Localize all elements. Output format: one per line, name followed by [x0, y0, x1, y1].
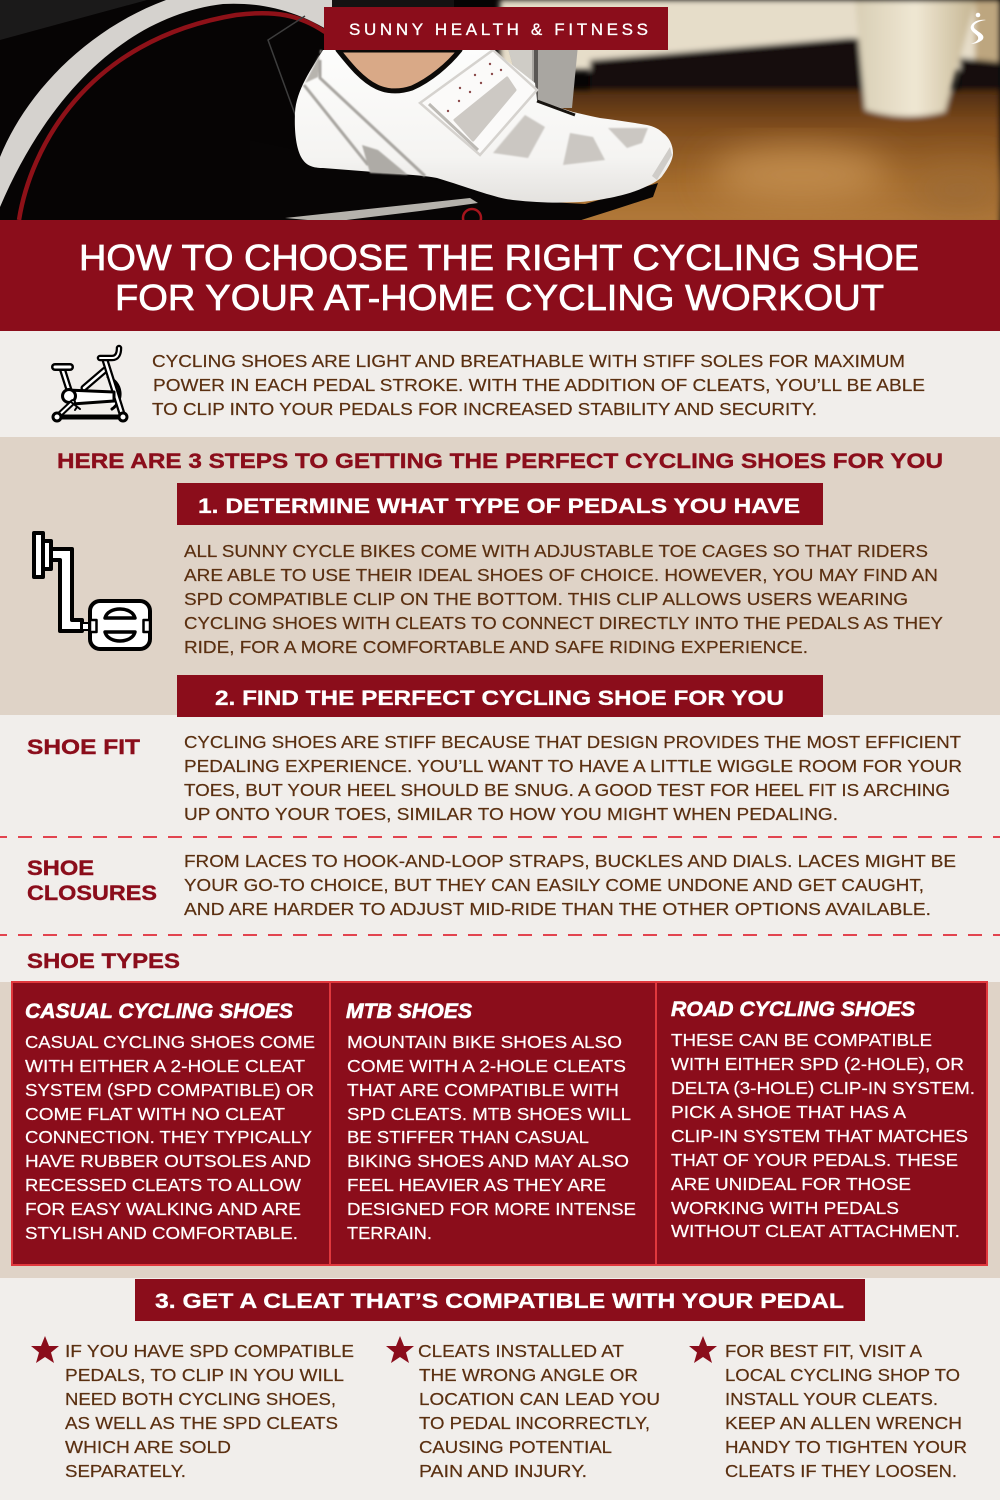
step 1 banner [177, 483, 823, 525]
tip 1 text: SEPARATELY. [65, 1461, 186, 1481]
card: mtb shoes: BE STIFFER THAN CASUAL [347, 1127, 589, 1147]
step 1 text: RIDE, FOR A MORE COMFORTABLE AND SAFE RIDING EXPERIENCE. [184, 637, 808, 657]
card: road cycling shoes [671, 998, 975, 1241]
step 1 banner: 1. DETERMINE WHAT TYPE OF PEDALS YOU HAVE [198, 494, 800, 518]
card: casual cycling shoes [25, 1000, 315, 1243]
steps heading: HERE ARE 3 STEPS TO GETTING THE PERFECT CYCLING SHOES FOR YOU [57, 449, 943, 473]
header tag: brand name [324, 7, 668, 50]
step 3 banner [135, 1279, 865, 1321]
card: casual cycling shoes: CASUAL CYCLING SHOES [25, 1000, 293, 1023]
step 2 banner: 2. FIND THE PERFECT CYCLING SHOE FOR YOU [215, 686, 784, 710]
icon: exercise bike [53, 348, 127, 421]
card: casual cycling shoes: CASUAL CYCLING SHOES COME [25, 1032, 315, 1052]
icon: star 1 [31, 1336, 59, 1363]
card: casual cycling shoes: SYSTEM (SPD COMPATIBLE) OR [25, 1080, 314, 1100]
card: road cycling shoes: THAT OF YOUR PEDALS. THESE [671, 1150, 958, 1170]
card: road cycling shoes: ARE UNIDEAL FOR THOSE [671, 1174, 911, 1194]
card: mtb shoes: SPD CLEATS. MTB SHOES WILL [347, 1104, 631, 1124]
tip 2 text [418, 1341, 660, 1481]
intro text: CYCLING SHOES ARE LIGHT AND BREATHABLE WITH STIFF SOLES FOR MAXIMUM [152, 351, 905, 371]
bike wheel rim [0, 0, 340, 220]
header tag: brand name: SUNNY HEALTH & FITNESS [349, 20, 648, 39]
tip 2 text: PAIN AND INJURY. [419, 1461, 587, 1481]
card: road cycling shoes: WORKING WITH PEDALS [671, 1198, 899, 1218]
card: casual cycling shoes: WITH EITHER A 2-HOLE CLEAT [25, 1056, 305, 1076]
sole and pedal [556, 183, 658, 220]
tip 3 text: LOCAL CYCLING SHOP TO [725, 1365, 960, 1385]
title banner: HOW TO CHOOSE THE RIGHT CYCLING SHOE [79, 237, 919, 278]
tip 1 text: IF YOU HAVE SPD COMPATIBLE [65, 1341, 354, 1361]
reflective stripes [304, 50, 425, 176]
tip 2 text: TO PEDAL INCORRECTLY, [419, 1413, 650, 1433]
card: road cycling shoes: DELTA (3-HOLE) CLIP-IN SYSTEM. [671, 1078, 975, 1098]
tip 3 text: HANDY TO TIGHTEN YOUR [725, 1437, 967, 1457]
title banner [0, 220, 1000, 331]
mesh panels [493, 115, 648, 165]
intro text [152, 351, 925, 419]
card: mtb shoes [346, 1000, 636, 1243]
shoe closures heading: CLOSURES [27, 881, 157, 905]
card: mtb shoes: BIKING SHOES AND MAY ALSO [347, 1151, 629, 1171]
icon: star 3 [689, 1336, 717, 1363]
step 1 text: ALL SUNNY CYCLE BIKES COME WITH ADJUSTABLE TOE CAGES SO THAT RIDERS [184, 541, 928, 561]
intro text: TO CLIP INTO YOUR PEDALS FOR INCREASED STABILITY AND SECURITY. [152, 399, 817, 419]
shoe closures heading: SHOE [27, 856, 94, 880]
panel: intro [0, 331, 1000, 437]
card: mtb shoes: MOUNTAIN BIKE SHOES ALSO [347, 1032, 622, 1052]
tip 1 text: AS WELL AS THE SPD CLEATS [65, 1413, 338, 1433]
tip 3 text [725, 1341, 967, 1481]
step 1 text [184, 541, 943, 657]
shoe closures text [184, 851, 956, 919]
panel: steps 1 background [0, 437, 1000, 715]
intro text: POWER IN EACH PEDAL STROKE. WITH THE ADDITION OF CLEATS, YOU’LL BE ABLE [153, 375, 925, 395]
card: mtb shoes: MTB SHOES [346, 1000, 472, 1023]
shoe closures text: YOUR GO-TO CHOICE, BUT THEY CAN EASILY COME UNDONE AND GET CAUGHT, [184, 875, 924, 895]
card: casual cycling shoes: HAVE RUBBER OUTSOLES AND [25, 1151, 311, 1171]
step 1 text: CYCLING SHOES WITH CLEATS TO CONNECT DIRECTLY INTO THE PEDALS AS THEY [184, 613, 943, 633]
shoe types heading: SHOE TYPES [27, 949, 180, 973]
panel: step 2 background [0, 675, 1000, 982]
card: mtb shoes: THAT ARE COMPATIBLE WITH [347, 1080, 619, 1100]
frame post [508, 50, 578, 108]
tip 2 text: LOCATION CAN LEAD YOU [419, 1389, 660, 1409]
shoe closures text: AND ARE HARDER TO ADJUST MID-RIDE THAN THE OTHER OPTIONS AVAILABLE. [184, 899, 931, 919]
card: casual cycling shoes: CONNECTION. THEY TYPICALLY [25, 1127, 312, 1147]
shoe upper [295, 50, 673, 203]
card: road cycling shoes: WITHOUT CLEAT ATTACHMENT. [671, 1221, 960, 1241]
card: casual cycling shoes: FOR EASY WALKING AND ARE [25, 1199, 301, 1219]
velcro strap [420, 50, 537, 155]
hero photo: cycling shoe on bike pedal [0, 0, 1000, 227]
panel: step 3 background [0, 1278, 1000, 1500]
step 2 banner [177, 675, 823, 717]
card: casual cycling shoes: RECESSED CLEATS TO ALLOW [25, 1175, 301, 1195]
card: mtb shoes: DESIGNED FOR MORE INTENSE [347, 1199, 636, 1219]
tip 3 text: FOR BEST FIT, VISIT A [725, 1341, 922, 1361]
step 1 text: SPD COMPATIBLE CLIP ON THE BOTTOM. THIS CLIP ALLOWS USERS WEARING [184, 589, 908, 609]
title banner: FOR YOUR AT-HOME CYCLING WORKOUT [115, 277, 884, 318]
card: casual cycling shoes: COME FLAT WITH NO CLEAT [25, 1104, 285, 1124]
shoe fit text: UP ONTO YOUR TOES, SIMILAR TO HOW YOU MIGHT WHEN PEDALING. [184, 804, 838, 824]
tip 2 text: CAUSING POTENTIAL [419, 1437, 612, 1457]
tip 1 text: WHICH ARE SOLD [65, 1437, 231, 1457]
card: road cycling shoes: ROAD CYCLING SHOES [671, 998, 915, 1021]
shoe fit text: TOES, BUT YOUR HEEL SHOULD BE SNUG. A GOOD TEST FOR HEEL FIT IS ARCHING [184, 780, 950, 800]
tip 2 text: CLEATS INSTALLED AT [418, 1341, 624, 1361]
tip 3 text: KEEP AN ALLEN WRENCH [725, 1413, 962, 1433]
tip 2 text: THE WRONG ANGLE OR [419, 1365, 638, 1385]
card: road cycling shoes: PICK A SHOE THAT HAS A [671, 1102, 906, 1122]
ankle opening [338, 50, 460, 91]
tip 3 text: CLEATS IF THEY LOOSEN. [725, 1461, 957, 1481]
shoe fit text [184, 732, 962, 824]
icon: brand logo figure [971, 13, 986, 44]
shoe fit heading: SHOE FIT [27, 735, 140, 759]
card: road cycling shoes: THESE CAN BE COMPATIBLE [671, 1030, 932, 1050]
shoe fit text: PEDALING EXPERIENCE. YOU’LL WANT TO HAVE A LITTLE WIGGLE ROOM FOR YOUR [184, 756, 962, 776]
card: road cycling shoes: WITH EITHER SPD (2-HOLE), OR [671, 1054, 964, 1074]
card: mtb shoes: COME WITH A 2-HOLE CLEATS [347, 1056, 626, 1076]
shoe fit text: CYCLING SHOES ARE STIFF BECAUSE THAT DESIGN PROVIDES THE MOST EFFICIENT [184, 732, 961, 752]
icon: bike pedal [34, 533, 150, 649]
card: road cycling shoes: CLIP-IN SYSTEM THAT MATCHES [671, 1126, 968, 1146]
step 3 banner: 3. GET A CLEAT THAT’S COMPATIBLE WITH YOUR PEDAL [155, 1289, 844, 1313]
icon: star 2 [386, 1336, 414, 1363]
tip 1 text: NEED BOTH CYCLING SHOES, [65, 1389, 336, 1409]
tip 1 text: PEDALS, TO CLIP IN YOU WILL [65, 1365, 344, 1385]
panel: shoe types background [0, 982, 1000, 1278]
step 1 text: ARE ABLE TO USE THEIR IDEAL SHOES OF CHOICE. HOWEVER, YOU MAY FIND AN [184, 565, 938, 585]
tip 1 text [65, 1341, 354, 1481]
card: mtb shoes: FEEL HEAVIER AS THEY ARE [347, 1175, 606, 1195]
card: mtb shoes: TERRAIN. [347, 1223, 432, 1243]
shoe closures text: FROM LACES TO HOOK-AND-LOOP STRAPS, BUCKLES AND DIALS. LACES MIGHT BE [184, 851, 956, 871]
tip 3 text: INSTALL YOUR CLEATS. [725, 1389, 938, 1409]
card: casual cycling shoes: STYLISH AND COMFORTABLE. [25, 1223, 298, 1243]
shoe closures heading [27, 856, 157, 905]
